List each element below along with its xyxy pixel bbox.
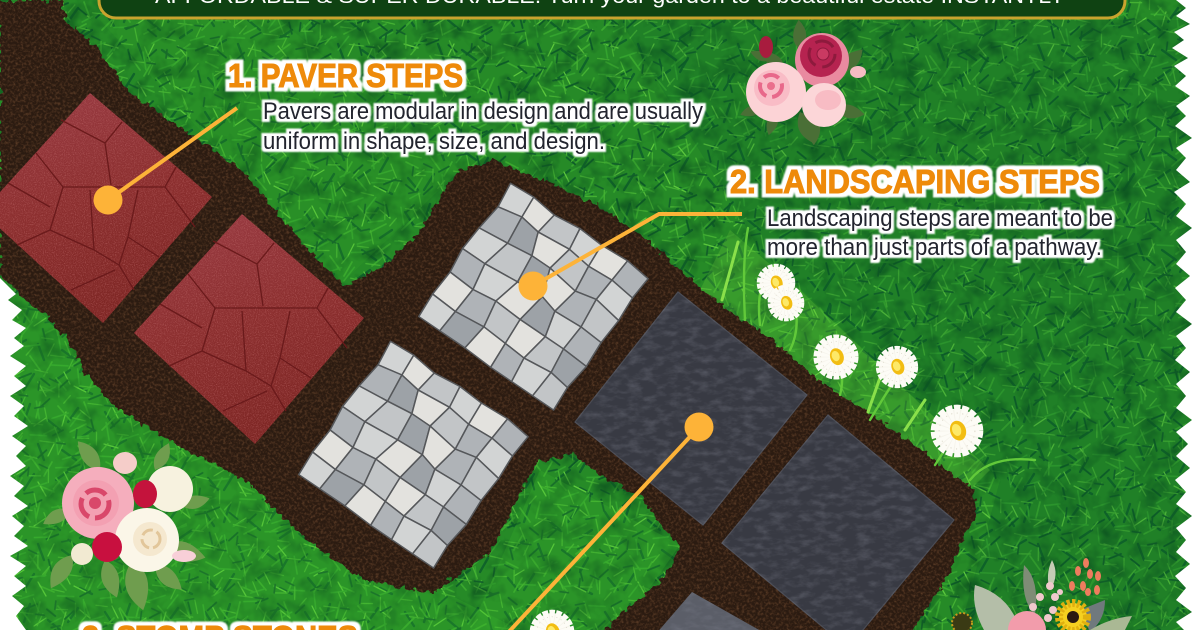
icon: top rose bouquet — [739, 19, 868, 146]
text block: paver steps: uniform in shape, size, and design. — [263, 128, 605, 155]
panel: red paver steps — [0, 93, 364, 444]
panel: landscaping mosaic stone steps — [295, 181, 650, 569]
arrow: leader line for paver steps — [94, 108, 237, 214]
flower stems near daisies — [722, 228, 1035, 480]
text block: paver steps: Pavers are modular in design and are usually — [263, 98, 703, 125]
arrow: leader line for landscaping steps — [518, 214, 742, 300]
text block: landscaping steps: Landscaping steps are meant to be — [767, 205, 1113, 232]
panel: dark slate stomp stones — [575, 292, 954, 630]
heading: paver steps: 1. PAVER STEPS — [228, 57, 463, 94]
icon: daisy flowers — [533, 267, 979, 630]
text block: landscaping steps: more than just parts of a pathway. — [767, 234, 1102, 261]
heading: landscaping steps: 2. LANDSCAPING STEPS — [730, 163, 1100, 200]
icon: bottom right bouquet — [952, 558, 1132, 630]
icon: left rose bouquet — [40, 436, 210, 612]
text block: landscaping steps — [767, 205, 1113, 261]
arrow: leader line for stomp stones — [505, 412, 714, 630]
text block: paver steps — [263, 98, 703, 155]
title banner — [99, 0, 1125, 18]
